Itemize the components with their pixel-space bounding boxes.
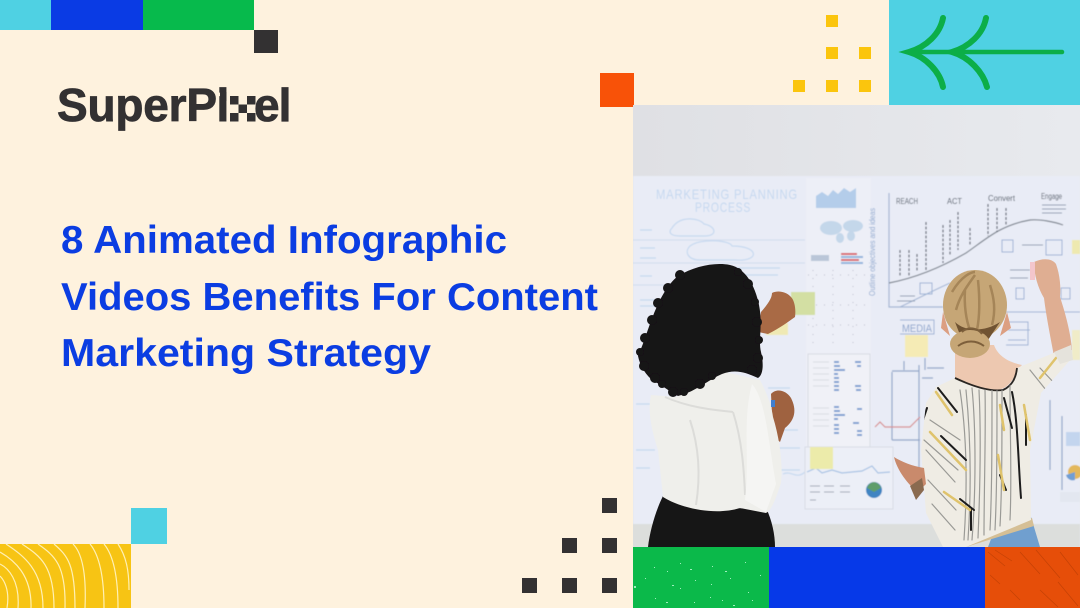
lower hand xyxy=(771,391,794,442)
journey stage labels: ACT xyxy=(947,197,962,206)
orange square accent xyxy=(600,73,634,107)
journey stage labels: Engage xyxy=(1041,192,1062,201)
media box: MEDIA xyxy=(902,323,933,335)
title: Marketing Strategy xyxy=(61,332,431,375)
sticky note on report xyxy=(810,447,833,469)
blonde hair xyxy=(943,270,1007,338)
cyan panel with green double arrow xyxy=(889,0,1080,105)
journey stage labels: Convert xyxy=(988,194,1016,203)
logo: SuperPixel: SuperP xyxy=(57,79,217,131)
mini charts far right xyxy=(1066,432,1080,481)
icon: green arrow xyxy=(909,18,1062,87)
map: world xyxy=(820,220,863,243)
top colour bars xyxy=(0,0,278,53)
logo: SuperPixel xyxy=(57,79,290,131)
vertical note: Outline objectives and ideas xyxy=(868,208,877,296)
sticky notes xyxy=(791,292,815,315)
arm and raised hand xyxy=(758,292,795,334)
sketch: marketing planning process: PROCESS xyxy=(695,199,751,215)
bar chart sheets xyxy=(808,354,870,448)
dark dot grid xyxy=(522,498,617,593)
title xyxy=(61,219,598,375)
bottom colour blocks xyxy=(633,547,1080,608)
cyan square accent xyxy=(131,508,167,544)
logo: SuperPixel: i xyxy=(216,79,229,131)
striped blouse xyxy=(921,352,1072,547)
handwritten vertical lists xyxy=(900,204,1006,277)
dotted grid sheet xyxy=(808,270,865,350)
chart: blue area xyxy=(816,188,856,208)
raised arm and hand xyxy=(1034,259,1072,356)
process lines right of bars xyxy=(875,358,1062,490)
textured green block xyxy=(633,547,769,608)
jeans and belt xyxy=(988,517,1040,547)
yellow dot grid xyxy=(793,15,871,92)
photo: two women planning at a whiteboard xyxy=(633,105,1080,547)
skirt xyxy=(648,496,775,547)
textured orange block xyxy=(985,547,1080,608)
yellow striped corner xyxy=(0,544,131,608)
journey stage labels: REACH xyxy=(896,197,918,206)
curly dark hair xyxy=(636,264,763,397)
chart: customer journey curve xyxy=(889,193,1063,307)
title: Videos Benefits For Content xyxy=(61,276,598,319)
woman on the right xyxy=(894,259,1073,547)
sketch: marketing planning process xyxy=(656,189,796,212)
sketch: marketing planning process: MARKETING PLANNING xyxy=(656,186,798,202)
title: 8 Animated Infographic xyxy=(61,219,507,262)
logo: SuperPixel: el xyxy=(254,79,290,131)
lower hand with pen xyxy=(894,457,926,486)
white blouse xyxy=(650,370,782,513)
report sheet xyxy=(805,447,893,509)
wall charts paper xyxy=(633,176,1080,547)
neck and shoulders xyxy=(955,345,1022,390)
chart: red and blue bars xyxy=(811,253,863,264)
woman on the left xyxy=(636,264,795,547)
journey stage labels xyxy=(896,192,1062,204)
